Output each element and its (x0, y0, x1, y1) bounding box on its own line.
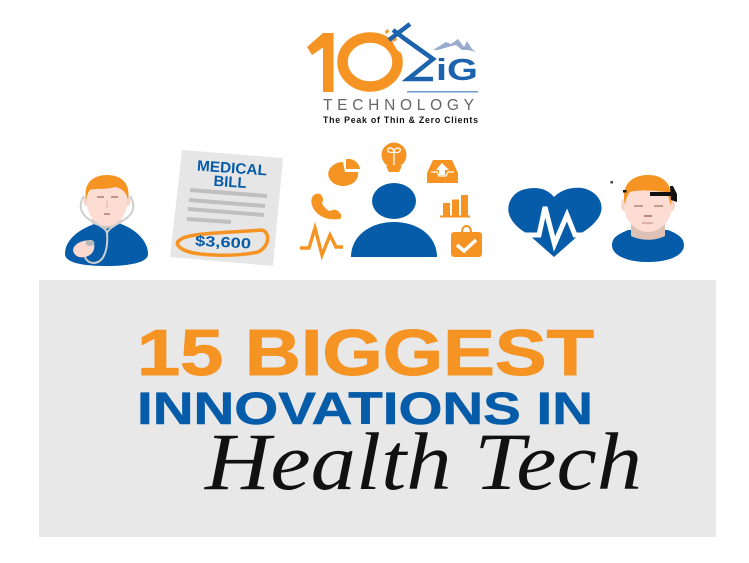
icon: man wearing smart glasses (610, 175, 684, 262)
icon: pulse line (300, 228, 343, 255)
icon: doctor with stethoscope (65, 175, 148, 266)
panel: medical bill (170, 150, 283, 266)
logo text: Technology: TECHNOLOGY (323, 97, 474, 114)
pick gap in zero (386, 30, 410, 60)
bill heading: MEDICAL (196, 158, 267, 179)
bill heading: BILL (213, 173, 247, 192)
icon: heart with pulse (508, 188, 602, 257)
icon group: person surrounded by tasks (300, 142, 482, 257)
bill amount: $3,600 (195, 234, 251, 253)
icon: clipboard check (451, 226, 482, 257)
person (351, 183, 437, 257)
icon: pie chart (328, 159, 360, 186)
orange chips (385, 29, 397, 45)
bill heading (195, 158, 267, 193)
logo tagline: The Peak of Thin & Zero Clients (323, 115, 478, 125)
logo rule (407, 91, 478, 92)
logo numeral zero (342, 38, 398, 86)
icon: light bulb (382, 142, 406, 172)
logo wordmark iG: iG (436, 52, 478, 87)
circled amount (177, 230, 268, 255)
icon: inbox tray (427, 160, 458, 183)
heading: Health Tech: Health Tech (204, 416, 642, 507)
glasses (610, 181, 677, 202)
blue sigma and pick (389, 24, 433, 79)
bill text lines (187, 190, 267, 222)
heading: 15 Biggest: 15 BIGGEST (137, 316, 594, 389)
icon: bar chart (440, 195, 470, 218)
logo numeral one (307, 33, 334, 92)
mountains (433, 39, 476, 52)
panel: title banner (39, 280, 716, 537)
logo: 10ZiG Technology (307, 24, 478, 125)
heading: Innovations in: INNOVATIONS IN (137, 383, 593, 434)
icon: phone (311, 194, 341, 219)
